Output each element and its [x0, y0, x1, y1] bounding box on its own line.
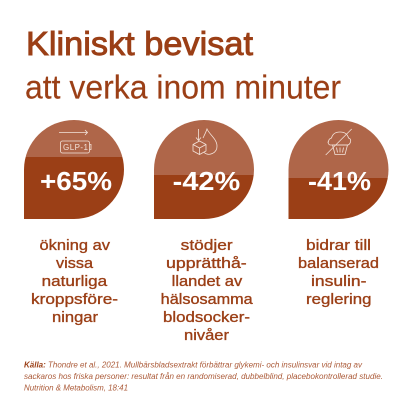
heading: regular line: att verka inom minuter — [25, 69, 341, 106]
panel: blood sugar stat — [154, 119, 254, 344]
source line 3: Nutrition & Metabolism, 18:41 — [24, 382, 128, 392]
description: nivåer — [184, 327, 229, 344]
description: bidrar till — [306, 237, 371, 254]
source line 1: Källa: Thondre et al., 2021. Mullbärsbladsextrakt förbättrar glykemi- och insulinsvar vid intag av — [24, 360, 363, 370]
title — [25, 26, 341, 106]
description: insulin- — [311, 273, 366, 290]
source line 2: sackaros hos friska personer: resultat från en randomiserad, dubbelblind, placebokontrollerad studie. — [24, 371, 383, 381]
description: balanserad — [298, 255, 379, 272]
heading: bold line: Kliniskt bevisat — [26, 26, 254, 63]
description: stödjer — [181, 237, 233, 254]
stat value: -41% — [308, 166, 371, 196]
panel: GLP-1 stat — [24, 119, 124, 326]
source note — [24, 360, 383, 392]
description: reglering — [306, 291, 372, 308]
description — [31, 237, 118, 326]
description: llandet av — [172, 273, 243, 290]
stat value: -42% — [173, 166, 240, 196]
description: ningar — [52, 309, 98, 326]
description: ökning av — [40, 237, 111, 254]
icon: GLP-1 with arrow — [59, 130, 91, 153]
shape: two-tone drop — [24, 119, 124, 220]
description: hälsosamma — [161, 291, 253, 308]
description: blodsocker- — [163, 309, 250, 326]
panel: insulin stat — [288, 119, 389, 308]
description — [298, 237, 379, 308]
stat value: +65% — [40, 166, 112, 196]
description: kroppsföre- — [31, 291, 118, 308]
icon: sugar cube and drop — [193, 129, 217, 154]
shape: two-tone drop — [288, 119, 389, 220]
icon: crossed-out muffin — [326, 129, 352, 155]
icon: GLP-1 with arrow: GLP-1 — [63, 143, 89, 152]
description — [161, 237, 253, 344]
description: naturliga — [42, 273, 108, 290]
description: vissa — [56, 255, 94, 272]
shape: two-tone drop — [154, 119, 254, 220]
description: upprätthå- — [166, 255, 247, 272]
